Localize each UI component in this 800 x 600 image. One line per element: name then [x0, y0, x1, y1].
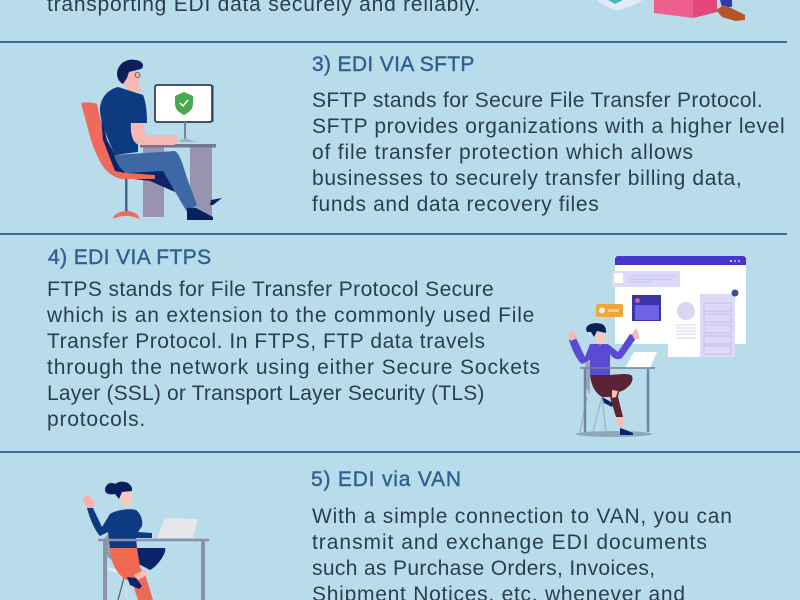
text block: FTPS description: Transfer Protocol. In FTPS, FTP data travels	[47, 330, 486, 353]
front leg and shoe	[114, 151, 213, 220]
heading: EDI via FTPS: 4) EDI VIA FTPS	[48, 246, 212, 269]
desk	[140, 144, 216, 217]
text block: VAN description	[312, 505, 733, 600]
text block: FTPS description: which is an extension to the commonly used File	[47, 304, 535, 327]
chair and stool	[103, 528, 127, 600]
text block: SFTP description: SFTP provides organizations with a higher level	[312, 115, 785, 138]
text block: VAN description: transmit and exchange EDI documents	[312, 531, 708, 554]
head	[117, 60, 143, 92]
text block: VAN description: such as Purchase Orders, Invoices,	[312, 557, 655, 580]
text block: SFTP description: funds and data recovery files	[312, 193, 599, 216]
text block: VAN description: With a simple connection to VAN, you can	[312, 505, 733, 528]
browser window	[612, 256, 746, 344]
chair	[81, 102, 155, 219]
desk and laptop	[98, 518, 209, 600]
heading: EDI via VAN: 5) EDI via VAN	[311, 468, 462, 491]
illustration: shield and person on box, cropped at top	[597, 0, 745, 21]
woman upper body	[82, 482, 152, 548]
far foot	[210, 198, 222, 205]
text block: SFTP description: businesses to securely transfer billing data,	[312, 167, 742, 190]
text block: SFTP description: of file transfer protection which allows	[312, 141, 694, 164]
text block: FTPS description: FTPS stands for File Transfer Protocol Secure	[47, 278, 494, 301]
orange badge	[596, 304, 623, 317]
torso	[100, 87, 147, 155]
text block: FTPS description: Layer (SSL) or Transport Layer Security (TLS)	[47, 382, 485, 405]
woman	[568, 323, 655, 435]
heading: EDI via SFTP: 3) EDI VIA SFTP	[312, 53, 475, 76]
profile card	[668, 290, 738, 357]
text block: FTPS description: protocols.	[47, 408, 146, 431]
arm	[131, 123, 178, 145]
text block: FTPS description	[47, 278, 541, 431]
text block: SFTP description	[312, 89, 785, 216]
illustration: woman at laptop, cropped at bottom	[82, 482, 209, 600]
torso back shadow	[101, 115, 125, 173]
woman lower body	[110, 548, 165, 600]
desk and stool	[576, 352, 657, 437]
illustration: woman with website wireframe	[568, 256, 746, 437]
illustration: man at computer with security shield	[81, 60, 222, 220]
monitor	[155, 85, 214, 142]
back leg	[118, 160, 175, 192]
text block: SFTP description: SFTP stands for Secure File Transfer Protocol.	[312, 89, 763, 112]
text block: FTPS description: through the network using either Secure Sockets	[47, 356, 541, 379]
